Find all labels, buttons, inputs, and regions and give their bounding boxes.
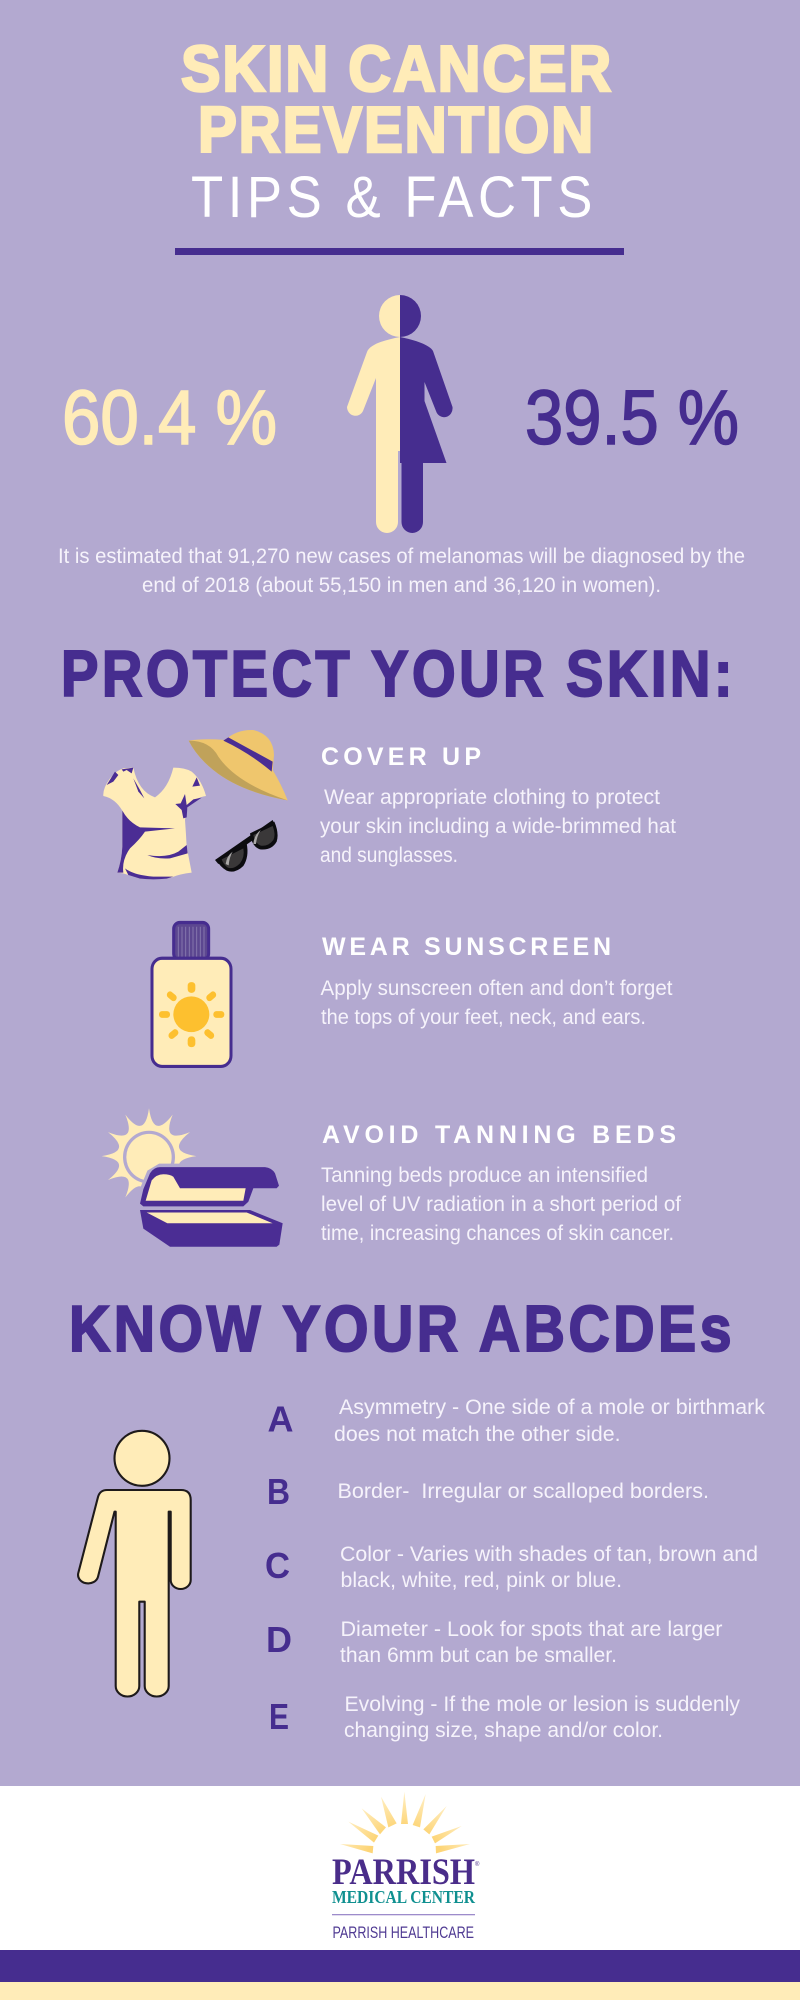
item: asymmetry	[268, 1396, 765, 1446]
text: cover up description: and sunglasses.	[320, 844, 458, 867]
panel: cover up	[103, 730, 676, 879]
text: cover up description: your skin including a wide-brimmed hat	[320, 815, 676, 838]
title line: skin cancer: SKIN CANCER	[181, 32, 613, 105]
subheading: cover up: COVER UP	[321, 743, 481, 771]
text: sunscreen description	[320, 977, 673, 1029]
text: melanoma estimate: It is estimated that 91,270 new cases of melanomas will be diagnosed by the	[58, 545, 745, 568]
text: cover up description: Wear appropriate clothing to protect	[324, 786, 660, 809]
item: border	[267, 1471, 709, 1512]
text: tanning bed description: time, increasing chances of skin cancer.	[321, 1222, 674, 1245]
item: color	[265, 1543, 758, 1592]
icon: sunscreen bottle	[152, 922, 231, 1066]
subheading: wear sunscreen: WEAR SUNSCREEN	[322, 933, 611, 961]
text: melanoma estimate: end of 2018 (about 55,150 in men and 36,120 in women).	[142, 574, 661, 597]
logo: parrish wordmark: PARRISH	[332, 1852, 475, 1893]
text: sunscreen description: the tops of your feet, neck, and ears.	[321, 1006, 646, 1029]
logo: sun rays	[340, 1792, 470, 1853]
title block	[181, 32, 613, 230]
item: diameter: than 6mm but can be smaller.	[340, 1644, 617, 1667]
statistic: men percentage: 60.4 %	[62, 375, 277, 461]
item: asymmetry: Asymmetry - One side of a mole or birthmark	[339, 1396, 765, 1419]
item: color: Color - Varies with shades of tan, brown and	[340, 1543, 758, 1566]
icon: shirt, hat and sunglasses	[103, 730, 288, 879]
item: diameter: D	[266, 1619, 292, 1660]
panel: abcde checklist	[78, 1396, 765, 1742]
subtitle: tips and facts: TIPS & FACTS	[191, 165, 597, 230]
item: color: black, white, red, pink or blue.	[340, 1569, 622, 1592]
logo: medical center: MEDICAL CENTER	[332, 1887, 475, 1907]
text: tanning bed description	[321, 1164, 681, 1245]
item: color: C	[265, 1545, 290, 1586]
text: tanning bed description: Tanning beds produce an intensified	[321, 1164, 648, 1187]
footer band with logo	[0, 1786, 800, 2000]
text: melanoma estimate	[58, 545, 745, 597]
item: evolving: Evolving - If the mole or lesion is suddenly	[344, 1693, 740, 1716]
panel: wear sunscreen	[152, 922, 673, 1066]
text: tanning bed description: level of UV radiation in a short period of	[321, 1193, 681, 1216]
item: diameter: Diameter - Look for spots that are larger	[340, 1618, 722, 1641]
item: evolving: E	[269, 1696, 289, 1737]
statistic panel: men and women	[58, 295, 745, 597]
icon: half man half woman figure	[347, 295, 453, 533]
text: cover up description	[320, 786, 676, 867]
icon: person outline	[78, 1431, 191, 1696]
statistic: women percentage: 39.5 %	[525, 375, 739, 461]
item: asymmetry: does not match the other side.	[334, 1423, 620, 1446]
item: asymmetry: A	[268, 1398, 294, 1440]
icon: sun and tanning bed	[102, 1108, 283, 1247]
item: border: B	[267, 1471, 290, 1512]
item: evolving: changing size, shape and/or color.	[344, 1719, 663, 1742]
panel: avoid tanning beds	[102, 1108, 681, 1247]
subheading: avoid tanning beds: AVOID TANNING BEDS	[322, 1121, 676, 1149]
item: evolving	[269, 1693, 740, 1742]
item: border: Border- Irregular or scalloped borders.	[338, 1480, 709, 1503]
logo: parrish healthcare: PARRISH HEALTHCARE	[332, 1923, 474, 1942]
logo: registered mark: ®	[475, 1861, 480, 1868]
item: diameter	[266, 1618, 722, 1667]
title line: prevention: PREVENTION	[198, 93, 595, 166]
text: sunscreen description: Apply sunscreen often and don’t forget	[320, 977, 673, 1000]
